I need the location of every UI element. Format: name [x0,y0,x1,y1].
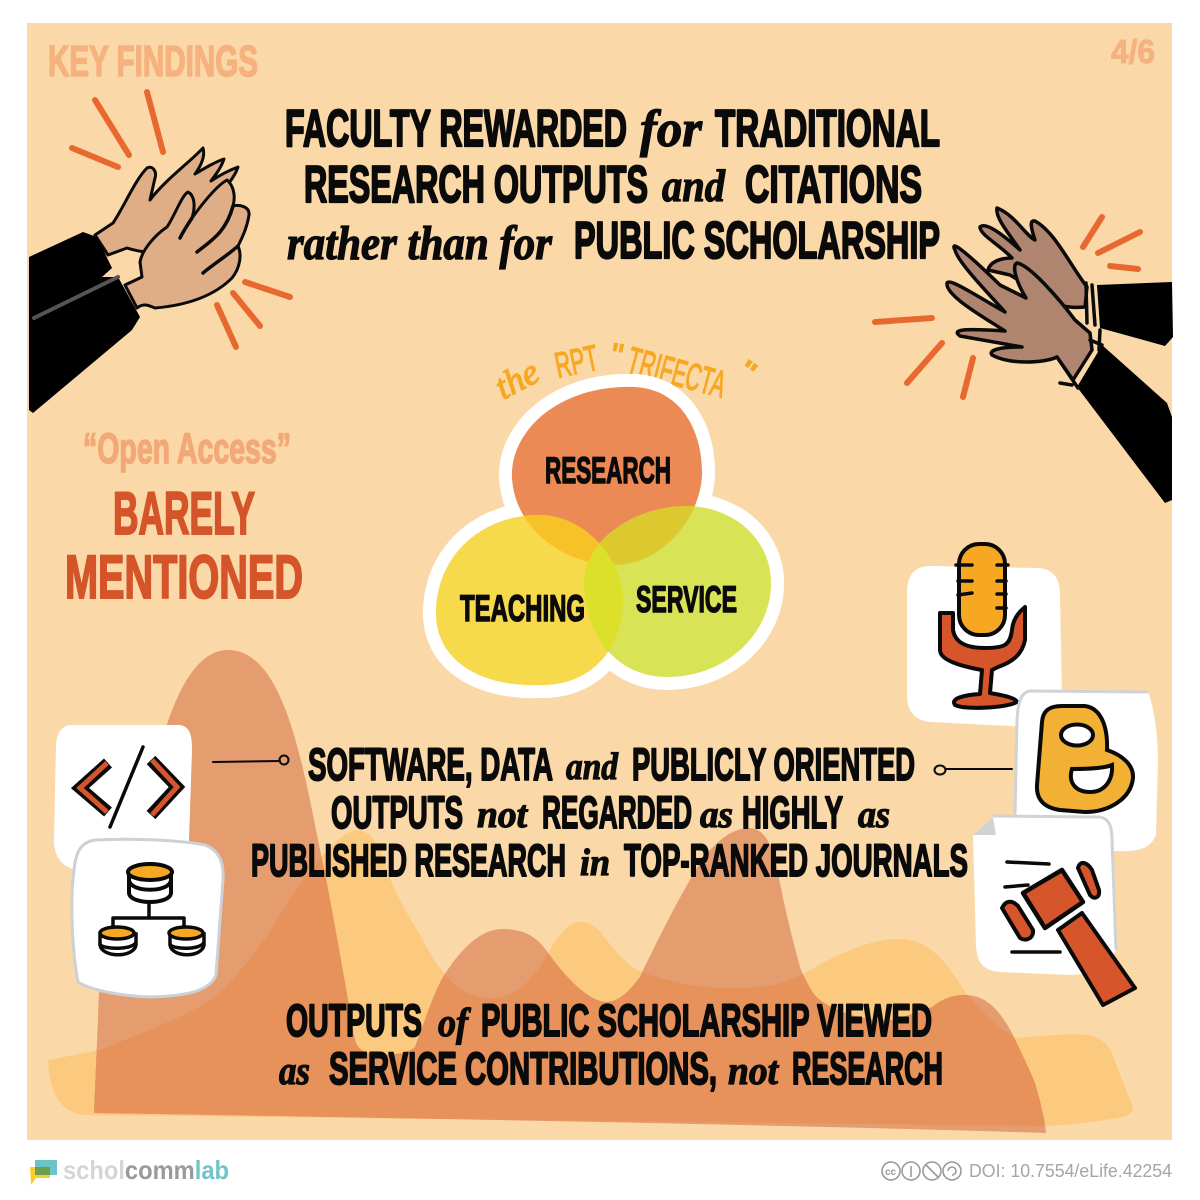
front hand [947,246,1092,380]
middle statement: not [477,794,528,836]
service label: SERVICE [636,579,737,620]
blogger letter [1037,706,1133,812]
trifecta label: " [608,336,626,376]
headline: CITATIONS [745,156,922,214]
research label: RESEARCH [545,450,671,491]
bottom statement: SERVICE CONTRIBUTIONS, [329,1043,717,1094]
teaching and service overlap [584,544,623,652]
middle statement: OUTPUTS [331,787,463,838]
icon: clap rays left [72,92,290,347]
left chevron [80,763,108,812]
right connector [934,766,1012,774]
middle statement: PUBLICLY ORIENTED [632,739,915,790]
middle statement: TOP-RANKED JOURNALS [624,835,968,886]
middle statement: PUBLISHED RESEARCH [251,835,566,886]
research and service overlap [596,506,695,565]
sleeve seam [34,277,118,318]
hill overlap [94,857,1045,1126]
parent database [128,864,172,902]
finger lines [180,206,238,273]
microphone head [959,544,1005,635]
gavel handle [1058,913,1135,1005]
trifecta label: " [732,355,762,389]
page number: 4/6 [1111,33,1155,70]
bottom statement: not [728,1048,780,1093]
landscape of hills [48,650,1133,1133]
middle statement: as [700,794,733,836]
bottom statement: PUBLIC SCHOLARSHIP VIEWED [481,995,932,1046]
child database left [100,927,136,955]
trifecta label: RPT [551,337,602,386]
middle statement: REGARDED [542,787,692,838]
sleeves [29,232,140,413]
microphone stand [940,607,1025,708]
open access callout [65,425,303,611]
right chevron [151,760,177,815]
back hand [95,148,238,255]
logo mark [30,1160,57,1185]
bottom statement: as [279,1048,310,1093]
icon: code tile [54,725,192,870]
icon: clapping hands right [947,208,1173,503]
icon: blogger tile [1014,691,1158,851]
back hand [980,208,1087,307]
left connector [213,756,288,764]
icon: microphone tile [907,544,1062,727]
front hand [125,180,249,308]
open access callout: BARELY [113,480,255,547]
section label: key findings: KEY FINDINGS [48,37,258,86]
dark hills [94,650,1046,1133]
gavel right pad [1078,863,1099,898]
headline: FACULTY REWARDED [285,100,627,158]
open access callout: “Open Access” [83,425,291,473]
document lines [1005,862,1060,952]
service circle [584,506,771,677]
doi citation: DOI: 10.7554/eLife.42254 [969,1161,1172,1181]
middle statement: as [858,794,890,836]
license icons: cc [885,1167,897,1178]
license icons [882,1162,961,1180]
bottom statement: OUTPUTS [286,995,422,1046]
icon: clap rays right [875,217,1140,397]
middle statement: and [566,746,619,788]
headline: TRADITIONAL [715,100,940,158]
teaching circle [436,515,623,685]
venn diagram [436,387,771,685]
teaching label: TEACHING [460,588,585,629]
open access callout: MENTIONED [65,543,303,611]
icon: clapping hands left [29,148,249,413]
icon: gavel tile [973,816,1135,1005]
headline: RESEARCH OUTPUTS [304,156,648,214]
trifecta label: TRIFECTA [623,340,730,407]
bottom statement: RESEARCH [792,1043,943,1094]
slash [110,747,143,827]
research circle [512,387,702,565]
headline: rather than for [287,217,553,270]
blogger upper hole [1061,724,1093,746]
connector tree [113,902,184,926]
white halo [436,387,771,685]
top sleeve [1097,282,1173,346]
lower sleeve [1077,345,1172,503]
child database right [169,927,204,955]
gavel head [1023,870,1083,928]
cuff lines [1057,283,1102,388]
icon: database tile [72,839,223,997]
middle statement: in [580,842,610,884]
headline: and [662,160,726,211]
blogger lower hole [1071,765,1112,792]
light hills [48,830,1133,1126]
gavel left pad [1002,902,1033,940]
trifecta label [488,336,762,407]
middle statement [251,739,968,886]
bottom statement: of [438,1000,471,1045]
middle statement: SOFTWARE, DATA [308,739,553,790]
headline: for [640,101,703,158]
trifecta label: the [488,351,546,407]
middle statement: HIGHLY [742,787,843,838]
microphone grille lines [956,565,1008,608]
research and teaching overlap [524,514,600,562]
bottom statement [279,995,943,1094]
logo: scholcommlab: scholcommlab [63,1155,229,1185]
headline: PUBLIC SCHOLARSHIP [574,212,940,270]
headline [285,100,940,270]
